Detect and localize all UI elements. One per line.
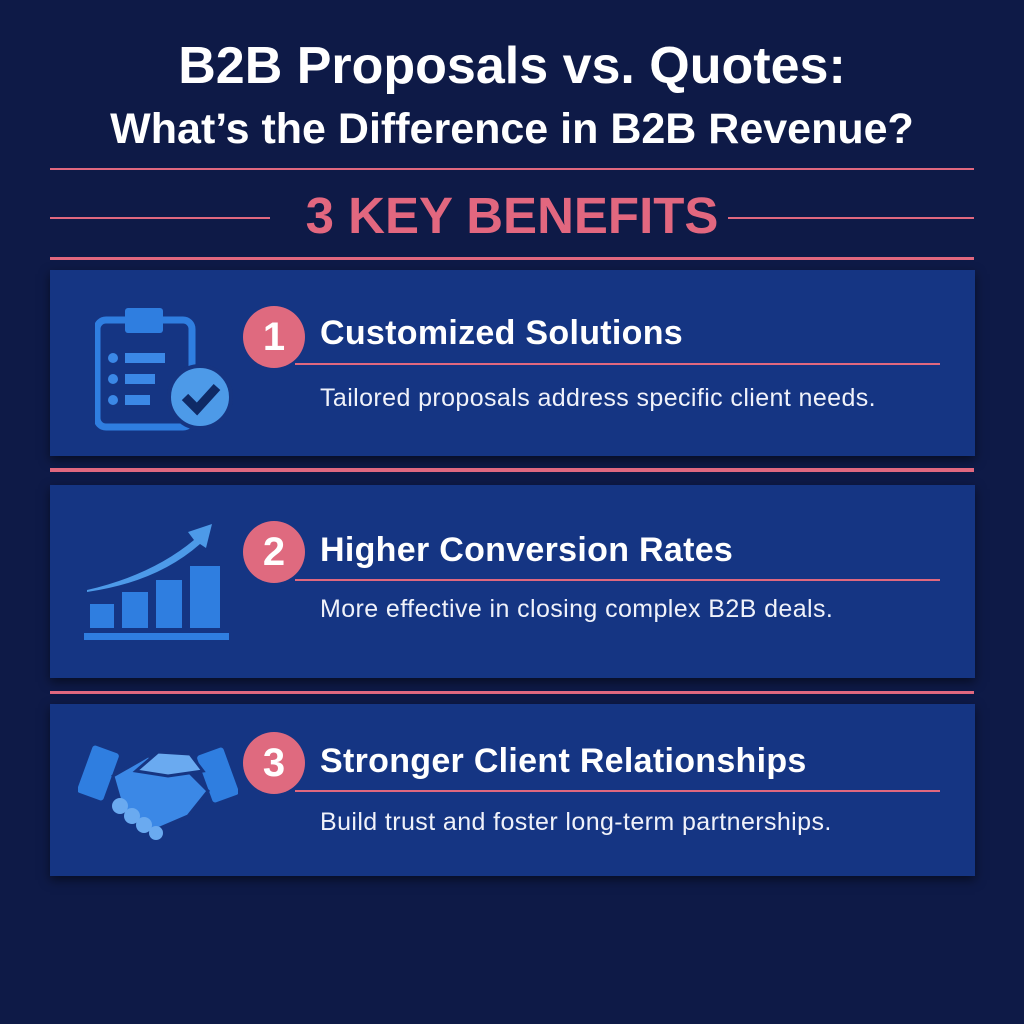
description: More effective in closing complex B2B deals.	[320, 595, 833, 623]
panel: benefit 2	[50, 485, 975, 678]
title	[110, 37, 914, 153]
panel: benefit 3	[50, 704, 975, 876]
icon: clipboard check	[95, 308, 229, 430]
title: What’s the Difference in B2B Revenue?	[110, 105, 914, 153]
number 1: 1	[263, 315, 285, 359]
description: Build trust and foster long-term partnerships.	[320, 808, 832, 836]
heading: Customized Solutions	[320, 314, 683, 352]
panel: benefit 1	[50, 270, 975, 456]
title: B2B Proposals vs. Quotes:	[178, 37, 846, 95]
description: Tailored proposals address specific client needs.	[320, 384, 876, 412]
number 3: 3	[263, 741, 285, 785]
heading: Stronger Client Relationships	[320, 742, 807, 780]
number 3	[243, 732, 305, 794]
icon: handshake	[78, 746, 238, 840]
number 1	[243, 306, 305, 368]
heading: Higher Conversion Rates	[320, 531, 733, 569]
number 2	[243, 521, 305, 583]
number 2: 2	[263, 530, 285, 574]
subtitle: 3 KEY BENEFITS	[306, 187, 718, 244]
icon: growth chart	[84, 524, 229, 640]
